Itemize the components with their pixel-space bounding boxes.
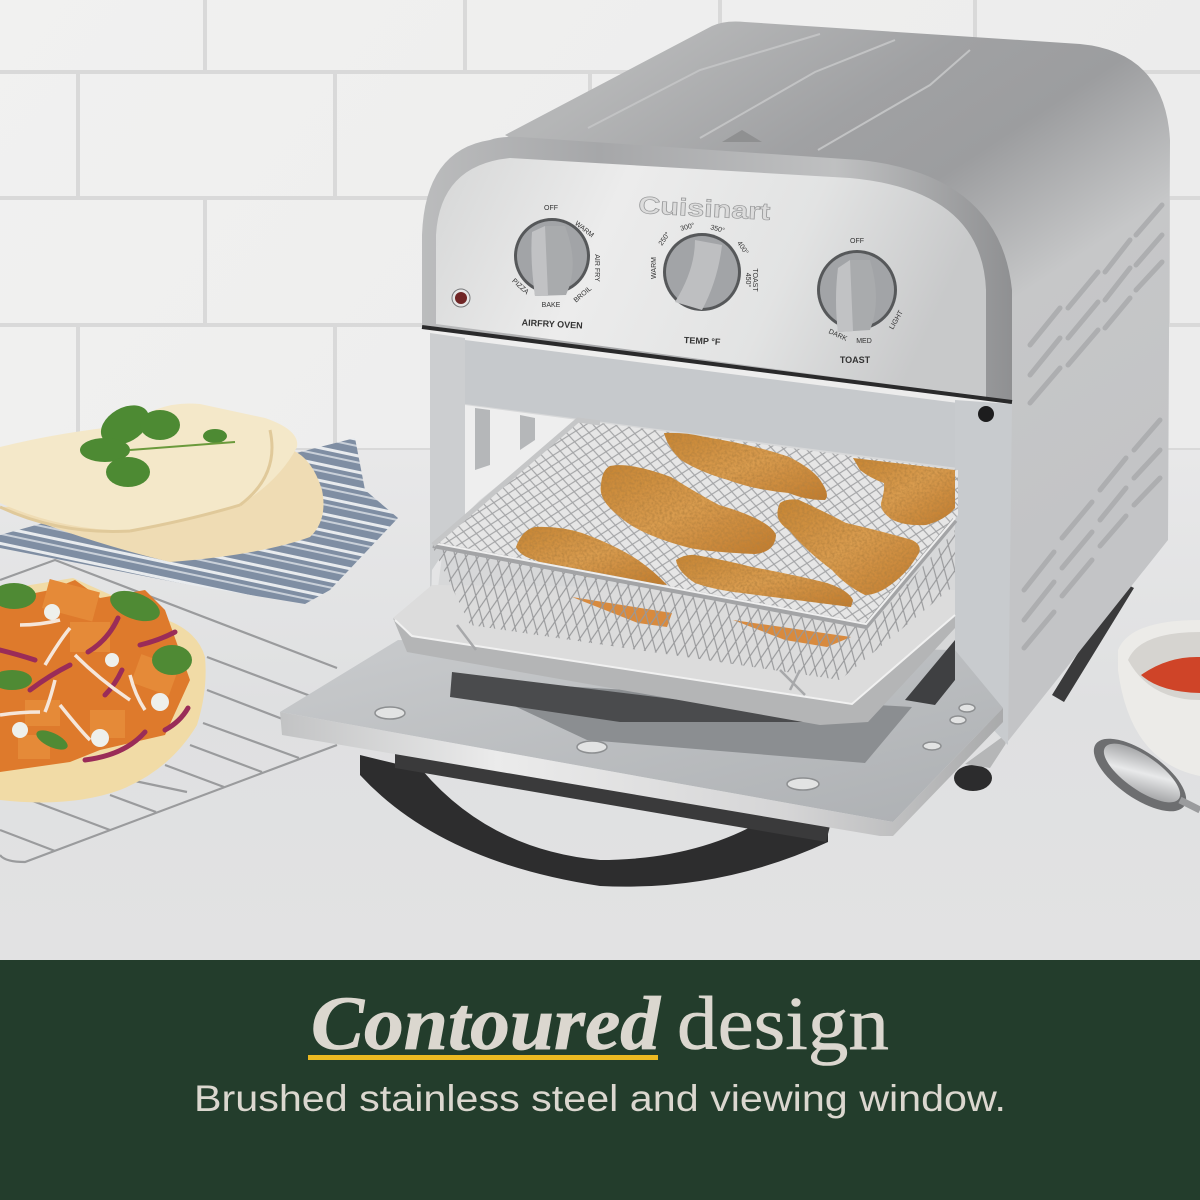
cord: [1160, 500, 1167, 540]
dial: airfry oven: PIZZA: [510, 278, 530, 296]
yellow underline: [308, 1055, 658, 1060]
naan shading: [0, 430, 272, 532]
door screws: [375, 704, 975, 790]
subheading: Brushed stainless steel and viewing window.: [194, 1078, 1006, 1119]
dial: toast: OFF: [850, 238, 864, 245]
air fryer oven: [280, 22, 1170, 887]
icon: cilantro garnish: [80, 397, 235, 487]
hinge shadow: [905, 640, 955, 705]
top triangle mark: [722, 130, 762, 142]
herb leaves: [0, 583, 192, 754]
dial: toast: DARK: [827, 328, 848, 343]
indicator light: [452, 289, 470, 307]
basket legs: [457, 625, 805, 695]
bowl inner: [1128, 632, 1200, 700]
bowl: [1118, 620, 1200, 776]
dial: temperature: 300°: [679, 221, 696, 233]
side vents: [1024, 205, 1162, 648]
wire rack: [0, 560, 337, 862]
wall tiles background: [0, 0, 1200, 460]
handle arch: [360, 755, 828, 887]
handle rear bar: [395, 750, 830, 842]
naan bread stack: [0, 403, 324, 562]
heading: Contoured: [311, 982, 661, 1066]
heading: design: [677, 982, 889, 1066]
upper naan: [0, 403, 297, 531]
sauce and chicken: [0, 580, 190, 772]
lower naan: [0, 450, 324, 562]
side viewing window: [465, 405, 578, 515]
footer panel: [0, 960, 1200, 1200]
black seam: [422, 327, 1012, 402]
dial: airfry oven: BROIL: [573, 285, 593, 304]
chicken tenders seen through the mesh: [572, 597, 851, 647]
dial: temperature: 400°: [735, 240, 750, 256]
dial: airfry oven: AIRFRY OVEN: [521, 317, 583, 331]
window struts: [475, 408, 535, 470]
chicken tenders: [516, 433, 955, 607]
dial: toast: LIGHT: [889, 309, 905, 331]
front foot: [954, 765, 992, 791]
fry basket rim: [433, 520, 955, 626]
dial: temperature: [651, 221, 758, 347]
right post: [955, 400, 1012, 745]
dial: airfry oven: WARM: [573, 220, 595, 239]
door handle: [360, 750, 830, 887]
counter top: [0, 450, 1200, 960]
fry basket floor: [433, 420, 958, 625]
upper inner band: [465, 340, 958, 468]
pizza flatbread: [0, 578, 206, 802]
heading: [311, 982, 889, 1066]
towel: [0, 438, 398, 604]
oven body: [505, 22, 1170, 745]
dial: temperature: TOAST: [751, 268, 758, 292]
hinge bracket: [965, 735, 1005, 768]
onions: [0, 618, 188, 760]
open oven door: [280, 640, 1003, 836]
dial: toast: MED: [856, 338, 872, 345]
tray front lip: [393, 615, 955, 725]
dial: airfry oven: OFF: [544, 205, 558, 212]
front metal frame: [422, 137, 1012, 402]
dial: temperature: WARM: [651, 257, 658, 279]
dial: airfry oven: BAKE: [542, 302, 561, 309]
spoon: [1083, 725, 1200, 825]
brushed control panel: [436, 158, 986, 397]
dial: temperature: 450°: [744, 273, 752, 287]
fry basket front mesh: [433, 530, 955, 680]
screw: [978, 406, 994, 422]
cheese drizzle: [0, 620, 145, 740]
tray rim highlight: [395, 615, 955, 704]
dial: temperature: 250°: [657, 230, 672, 247]
tray interior: [393, 585, 955, 705]
top ridges: [588, 34, 970, 150]
bowl of sauce: [1118, 620, 1200, 776]
dial: airfry oven: [510, 205, 600, 331]
crust: [0, 578, 206, 802]
dial: airfry oven: AIR FRY: [593, 254, 600, 282]
logo: Cuisinart: [638, 192, 771, 226]
dial: toast: [817, 238, 905, 365]
rear foot: [1052, 582, 1134, 702]
door recess: [459, 680, 912, 763]
dial: toast: TOAST: [840, 355, 871, 365]
sauce: [1141, 657, 1200, 693]
dark tray support: [450, 672, 860, 722]
door front edge: [280, 708, 1003, 836]
door top plate: [280, 640, 1003, 822]
tray: [393, 585, 955, 725]
blue cheese: [12, 604, 169, 747]
window interior: [430, 400, 958, 705]
left post: [430, 333, 465, 640]
dial: temperature: TEMP °F: [684, 335, 721, 347]
dial: temperature: 350°: [709, 223, 726, 235]
